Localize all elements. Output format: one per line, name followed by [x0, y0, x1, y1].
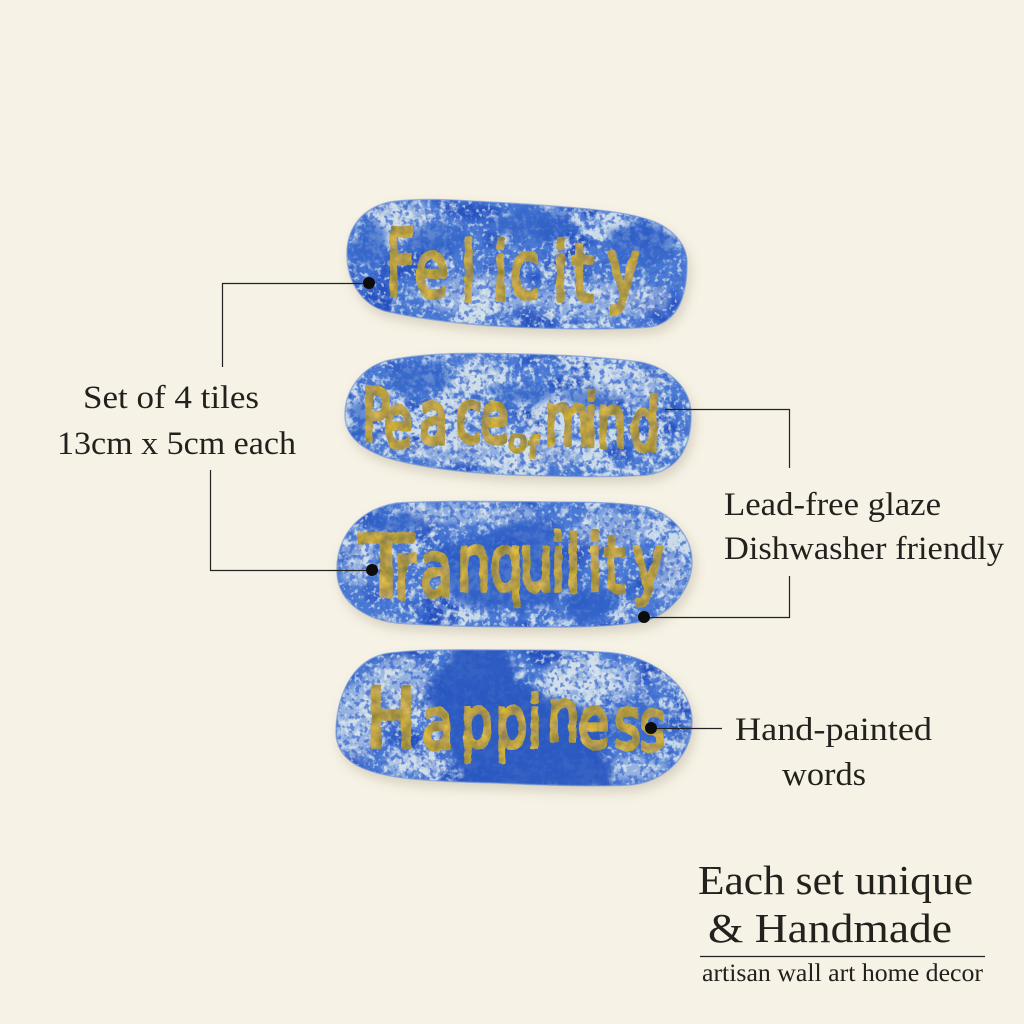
heading: each set unique: Each set unique [698, 857, 973, 903]
word: Peace of mind: mind [545, 380, 660, 468]
text: words: words [782, 757, 866, 793]
word: Tranquility: T [359, 518, 413, 618]
marker dot: Tranquility [366, 564, 378, 576]
word: Felicity: elicity [415, 224, 639, 321]
text: dishwasher friendly: Dishwasher friendly [724, 531, 1005, 567]
tile: Peace of mind [340, 350, 695, 483]
text: hand-painted: Hand-painted [735, 712, 933, 748]
heading: handmade: & Handmade [708, 905, 952, 951]
callout: hand-painted [645, 712, 933, 793]
word: Peace of mind: Peace [362, 375, 508, 465]
word: Peace of mind [362, 375, 660, 468]
marker dot: Felicity [363, 277, 375, 289]
word: Peace of mind: of [508, 424, 540, 466]
leader line: hand-painted [651, 728, 722, 730]
callout: size [57, 277, 378, 576]
word: Happiness: appiness [423, 676, 666, 767]
marker dot: Happiness [645, 722, 657, 734]
leader lines: glaze [644, 410, 790, 618]
word: Tranquility: ranquility [394, 517, 664, 617]
text: lead-free glaze: Lead-free glaze [724, 487, 941, 523]
tile: Felicity [340, 195, 695, 335]
text: set of 4 tiles: Set of 4 tiles [83, 380, 259, 416]
word: Felicity: F [386, 209, 415, 317]
leader lines: size [210, 284, 372, 570]
tile: Happiness [332, 645, 696, 792]
word: Happiness: H [366, 671, 416, 767]
brand block [698, 857, 985, 987]
tagline: artisan wall art home decor [702, 960, 984, 987]
text: dimensions: 13cm x 5cm each [57, 426, 297, 462]
callout: glaze [638, 410, 1005, 623]
marker dot: Tranquility edge [638, 611, 650, 623]
tile: Tranquility [332, 497, 696, 633]
